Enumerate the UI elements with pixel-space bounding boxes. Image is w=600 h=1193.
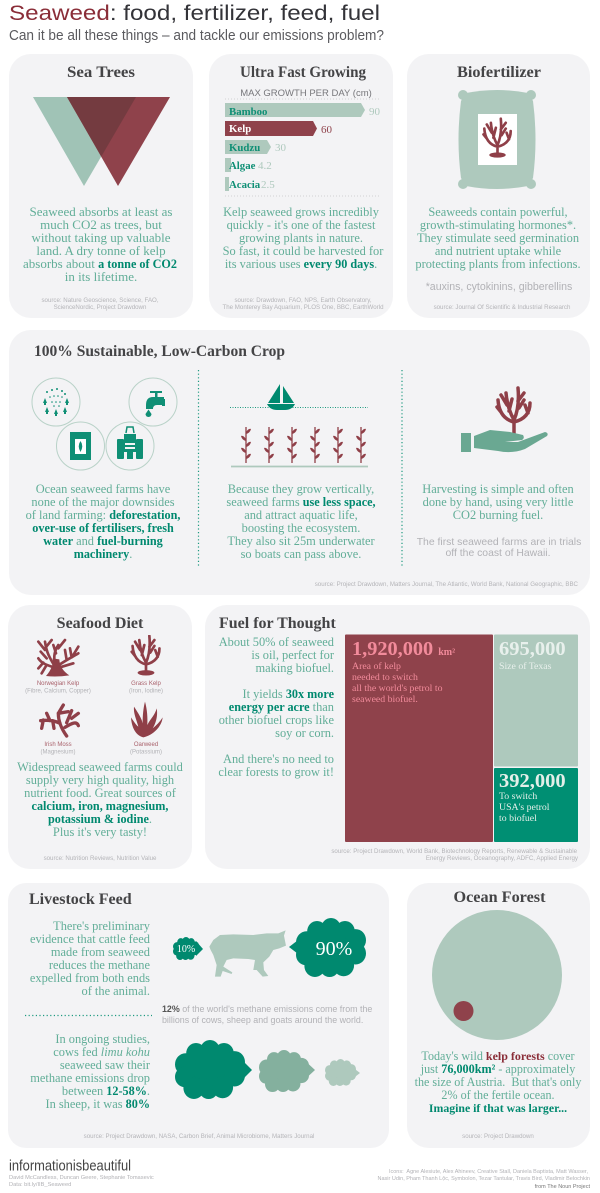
icon: boat over seaweed farm (230, 384, 368, 466)
heading: ultra fast growing: Ultra Fast Growing (240, 64, 366, 81)
label: grass kelp: (Iron, Iodine) (129, 688, 163, 694)
text: sea trees body: Seaweed absorbs at least as (30, 204, 172, 219)
text: biofertilizer body: and nutrient uptake while (435, 244, 562, 258)
text: vertical farming: and attract aquatic life, (244, 508, 358, 522)
icon: cloud 10 percent: 10% (177, 944, 195, 955)
text: limu kohu body: methane emissions drop (30, 1071, 150, 1085)
bar chart: growth per day: 90 (369, 106, 380, 118)
source: ocean forest: source: Project Drawdown (462, 1133, 534, 1140)
icon: hand holding seaweed (461, 388, 548, 452)
icon: downsides of land farming (32, 378, 177, 470)
text: fuel body: energy per acre than (229, 700, 334, 714)
source: sustainable: source: Project Drawdown, Matters Journal, The Atlantic, World Bank, National Geographic, BBC (315, 581, 579, 588)
text: farming downsides: water and fuel-burning (43, 534, 163, 548)
text: growth body: So fast, it could be harvested for (223, 244, 384, 258)
block: usa petrol: To switch (499, 791, 537, 802)
block: size of texas: Size of Texas (499, 661, 552, 672)
footer: icon credits: from The Noun Project (535, 1184, 590, 1190)
text: cattle feed body: reduces the methane (49, 958, 150, 972)
text: seafood body: calcium, iron, magnesium, (32, 799, 168, 813)
text: fuel body: other biofuel crops like (219, 713, 334, 727)
text: cattle feed body: evidence that cattle feed (30, 932, 151, 946)
text: limu kohu body: seaweed saw their (60, 1058, 151, 1072)
block: kelp area needed: needed to switch (352, 672, 418, 683)
block: usa petrol: USA's petrol (499, 802, 550, 813)
text: harvesting: CO2 burning fuel. (453, 508, 543, 522)
text: ocean forest body: the size of Austria. But that's only (415, 1075, 581, 1089)
text: sea trees body: absorbs about a tonne of CO2 (23, 256, 177, 271)
bar chart: growth per day: Kudzu (229, 142, 260, 154)
footer: credits: David McCandless, Duncan Geere, Stephanie Tomasevic (9, 1175, 154, 1181)
heading: livestock feed: Livestock Feed (29, 891, 132, 908)
icon: deforestation (43, 388, 69, 416)
footnote: hormones: *auxins, cytokinins, gibberellins (426, 281, 572, 293)
text: fuel body: is oil, perfect for (251, 648, 335, 662)
text: farming downsides: Ocean seaweed farms have (36, 482, 171, 496)
text: growth body: its various uses every 90 days. (225, 257, 377, 271)
bar chart: growth per day: 60 (321, 124, 332, 136)
text: biofertilizer body: Seaweeds contain powerful, (428, 205, 568, 219)
text: harvesting: Harvesting is simple and often (422, 482, 574, 496)
text: sea trees body: land. A dry tonne of kelp (36, 243, 166, 258)
text: vertical farming: boosting the ecosystem. (242, 521, 360, 535)
text: ocean forest body: Imagine if that was larger... (429, 1101, 567, 1115)
footer: credits: Data: bit.ly/IIB_Seaweed (9, 1182, 71, 1188)
block: kelp area needed: seaweed biofuel. (352, 694, 418, 705)
text: vertical farming: so boats can pass above. (241, 547, 361, 561)
text: growth body: Kelp seaweed grows incredibly (223, 205, 380, 219)
source: livestock: source: Project Drawdown, NASA, Carbon Brief, Animal Microbiome, Matters Journal (84, 1133, 314, 1140)
label: norwegian kelp: Norwegian Kelp (37, 681, 80, 687)
text: cattle feed body: expelled from both ends (30, 971, 150, 985)
heading: seafood diet: Seafood Diet (57, 615, 144, 632)
icon: cloud 90 percent: 90% (316, 938, 352, 960)
heading: sustainable crop: 100% Sustainable, Low-Carbon Crop (34, 343, 285, 360)
text: growth body: growing plants in nature. (239, 231, 363, 245)
text: cattle feed body: of the animal. (82, 984, 150, 998)
text: biofertilizer body: growth-stimulating hormones*. (420, 218, 576, 232)
text: seafood body: Plus it's very tasty! (53, 825, 147, 839)
text: farming downsides: of land farming: deforestation, (26, 508, 180, 522)
block: size of texas: 695,000 (499, 638, 566, 660)
footer: credits: informationisbeautiful (9, 1158, 131, 1174)
block: usa petrol: to biofuel (499, 813, 537, 824)
text: harvesting: done by hand, using very little (423, 495, 574, 509)
panel: seafood diet (8, 605, 192, 869)
text: seafood body: supply very high quality, high (26, 773, 175, 787)
icon: cloud medium (259, 1050, 315, 1092)
text: methane share: 12% of the world's methane emissions come from the (162, 1004, 372, 1014)
panel: livestock feed (8, 883, 389, 1148)
bar chart: growth per day: 30 (275, 142, 286, 154)
panel: ocean forest (407, 883, 590, 1148)
chart: area circles (432, 910, 562, 1040)
text: limu kohu body: cows fed limu kohu (53, 1045, 150, 1059)
icon: fertilizer bag (458, 90, 536, 189)
title: Seaweed : food, fertilizer, feed, fuel (9, 1, 380, 25)
panel: sea trees (9, 54, 193, 318)
text: limu kohu body: In ongoing studies, (55, 1032, 150, 1046)
text: biofertilizer body: protecting plants from infections. (415, 257, 581, 271)
source: sea trees: ScienceNordic, Project Drawdown (54, 304, 147, 311)
label: oarweed: Oarweed (134, 742, 158, 748)
source: biofertilizer: source: Journal Of Scientific & Industrial Research (434, 304, 571, 311)
text: ocean forest body: Today's wild kelp forests cover (421, 1049, 575, 1063)
label: irish moss: (Magnesium) (40, 750, 76, 756)
text: sea trees body: without taking up valuable (31, 230, 171, 245)
bar chart: growth per day: Algae (229, 160, 256, 172)
chart: overlapping triangles (33, 97, 170, 186)
text: fuel body: And there's no need to (223, 752, 334, 766)
block: size of texas (494, 634, 578, 766)
text: fuel body: making biofuel. (256, 661, 334, 675)
block: kelp area needed: 1,920,000 km² (352, 638, 455, 660)
text: seafood body: Widespread seaweed farms could (17, 760, 184, 774)
label: norwegian kelp: (Fibre, Calcium, Copper) (25, 688, 91, 694)
block: kelp area needed: all the world's petrol to (352, 683, 443, 694)
bar chart: growth per day (225, 88, 381, 196)
subtitle: Can it be all these things – and tackle our emissions problem? (9, 28, 384, 44)
text: fuel body: About 50% of seaweed (219, 635, 335, 649)
text: seafood body: nutrient food. Great sources of (24, 786, 177, 800)
source: sea trees: source: Nature Geoscience, Science, FAO, (41, 297, 159, 304)
icon: cloud small (325, 1059, 360, 1086)
text: farming downsides: machinery. (74, 547, 132, 561)
text: farming downsides: none of the major downsides (31, 495, 175, 509)
panel: ultra fast growing (209, 54, 393, 318)
heading: sea trees: Sea Trees (67, 64, 135, 81)
block: kelp area needed: Area of kelp (352, 661, 401, 672)
icon: irish moss (41, 705, 78, 736)
source: growth: The Monterey Bay Aquarium, PLOS One, BBC, EarthWorld (223, 304, 384, 311)
heading: fuel for thought: Fuel for Thought (219, 615, 336, 632)
text: fuel body: It yields 30x more (242, 687, 334, 701)
icon: cloud 10 percent (173, 937, 203, 960)
icon: grass kelp (132, 636, 159, 675)
block: usa petrol: 392,000 (499, 770, 566, 792)
footer: icon credits: Nasir Udin, Pham Thanh Lộc, Symbolon, Tezar Tantular, Travis Bird, Vladimir Belochkin (378, 1176, 590, 1182)
text: limu kohu body: In sheep, it was 80% (45, 1097, 150, 1111)
heading: ocean forest: Ocean Forest (454, 889, 546, 906)
bar chart: growth per day: Acacia (229, 179, 261, 191)
icon: oarweed (131, 702, 163, 737)
text: ocean forest body: just 76,000km² - approximately (421, 1062, 575, 1076)
text: growth body: quickly - it's one of the fastest (227, 218, 376, 232)
text: vertical farming: They also sit 25m underwater (227, 534, 376, 548)
icon: cloud 90 percent (289, 918, 366, 977)
bar chart: growth per day: Bamboo (229, 106, 267, 118)
text: seafood body: potassium & iodine. (48, 812, 152, 826)
bar chart: growth per day: 4.2 (258, 160, 272, 172)
footer: icon credits: Icons: Agne Alesiute, Alex Ahineev, Creative Stall, Daniela Baptista, Matt Wasser, (389, 1169, 588, 1175)
icon: fertilizer bag small (70, 432, 91, 460)
bar chart: growth per day: 2.5 (261, 179, 275, 191)
text: hawaii trials: off the coast of Hawaii. (446, 548, 550, 559)
label: oarweed: (Potassium) (130, 750, 162, 756)
icon: water tap (146, 391, 165, 417)
panel: sustainable crop (9, 330, 590, 595)
footer: credits (9, 1158, 154, 1188)
text: vertical farming: seaweed farms use less space, (226, 495, 376, 509)
text: farming downsides: over-use of fertilisers, fresh (32, 521, 174, 535)
text: ocean forest body: 2% of the fertile ocean. (441, 1088, 555, 1102)
bar chart: growth per day: Kelp (229, 123, 251, 135)
icon: norwegian kelp (38, 640, 78, 677)
source: growth: source: Drawdown, FAO, NPS, Earth Observatory, (234, 297, 372, 304)
block: usa petrol (494, 768, 578, 842)
text: limu kohu body: between 12-58%. (62, 1084, 150, 1098)
icon: tractor (117, 427, 143, 459)
icon: cow (209, 930, 286, 977)
text: sea trees body: in its lifetime. (65, 269, 137, 284)
label: irish moss: Irish Moss (44, 742, 72, 748)
source: fuel: source: Project Drawdown, World Bank, Biotechnology Reports, Renewable & Sustainable (331, 848, 578, 855)
bar chart: growth per day: MAX GROWTH PER DAY (cm) (240, 88, 372, 99)
text: biofertilizer body: They stimulate seed germination (417, 231, 579, 245)
text: sea trees body: much CO2 as trees, but (40, 217, 162, 232)
text: cattle feed body: made from seaweed (51, 945, 151, 959)
text: fuel body: soy or corn. (275, 726, 334, 740)
label: grass kelp: Grass Kelp (131, 681, 161, 687)
source: seafood: source: Nutrition Reviews, Nutrition Value (44, 855, 157, 862)
heading: biofertilizer: Biofertilizer (457, 64, 541, 81)
text: hawaii trials: The first seaweed farms are in trials (417, 537, 581, 548)
panel: fuel for thought (205, 605, 590, 869)
block: kelp area needed (345, 634, 493, 842)
icon: cloud large (175, 1040, 252, 1099)
chart: area comparison (345, 634, 578, 842)
panel: biofertilizer (407, 54, 590, 318)
source: fuel: Energy Reviews, Oceanography, ADFC, Applied Energy (426, 855, 579, 862)
text: methane share: billions of cows, sheep and goats around the world. (162, 1015, 363, 1025)
text: fuel body: clear forests to grow it! (218, 765, 334, 779)
text: cattle feed body: There's preliminary (53, 919, 151, 933)
text: vertical farming: Because they grow vertically, (228, 482, 374, 496)
